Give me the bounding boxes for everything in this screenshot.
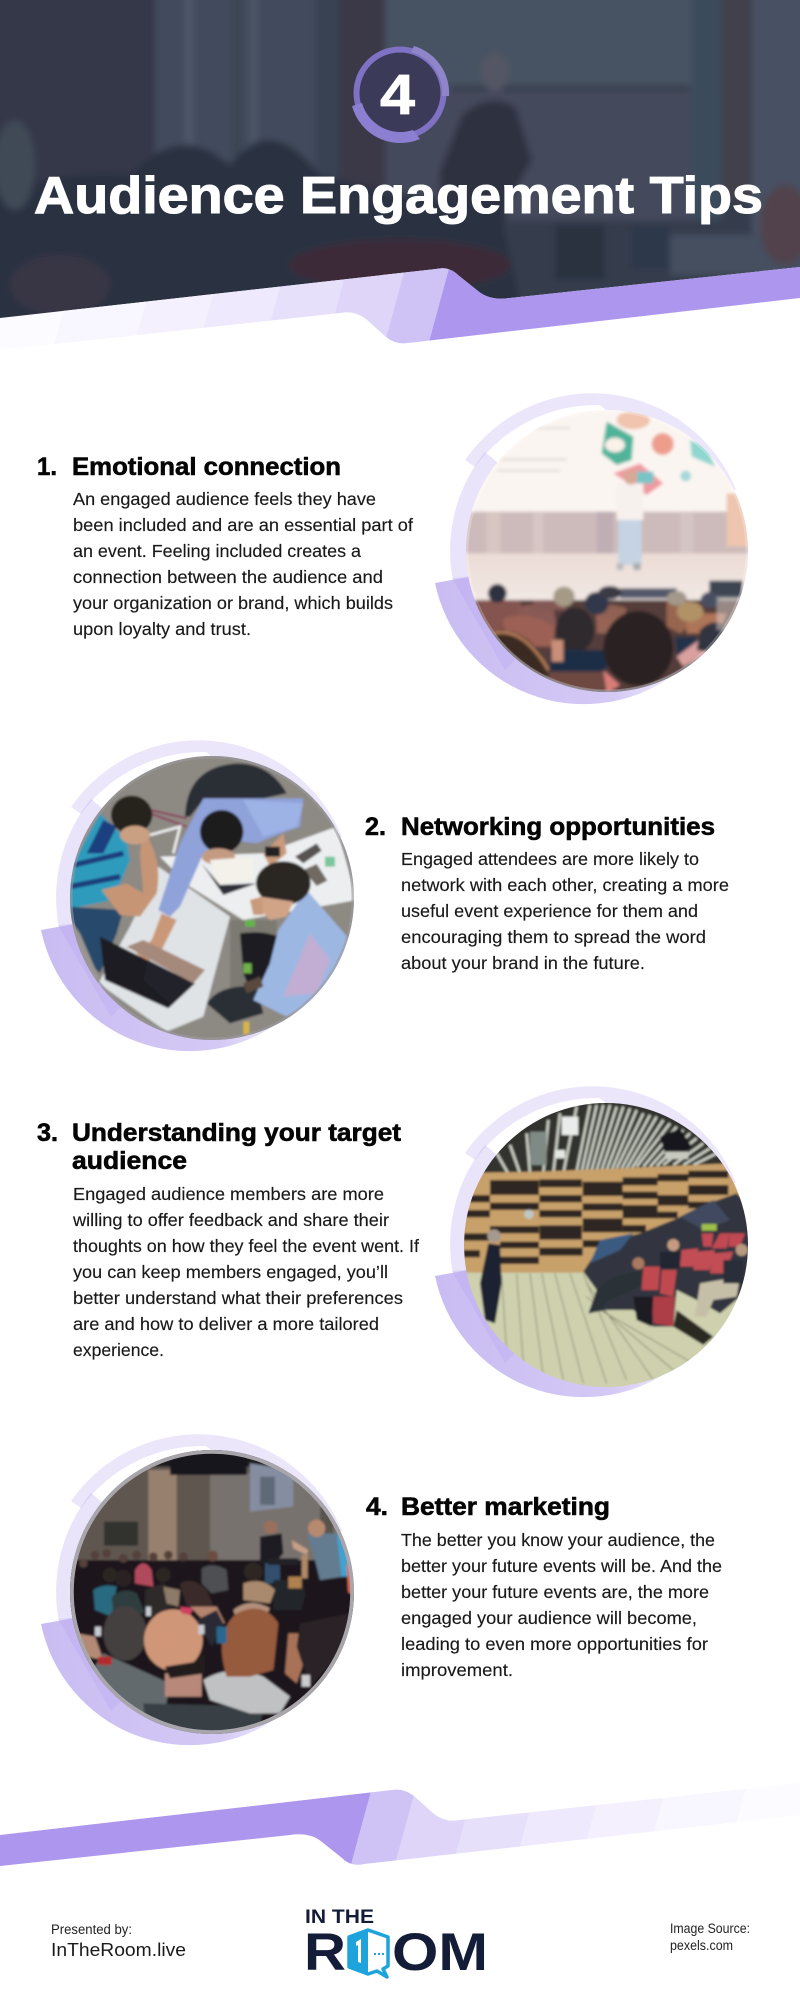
- tip 4 text: better your future events will be. And the: [401, 1556, 722, 1576]
- tip 3 heading: audience: [72, 1147, 187, 1175]
- tip 2 text: [401, 849, 729, 973]
- tip 1 heading: 1.: [37, 453, 57, 481]
- image source credit: [670, 1921, 750, 1953]
- ring graphic 3: [435, 1086, 736, 1397]
- panel: tip 2: [41, 740, 729, 1053]
- panel: tip 3: [37, 1086, 773, 1403]
- tip 4 heading: Better marketing: [401, 1493, 610, 1521]
- tip 3 text: thoughts on how they feel the event went. If: [73, 1236, 419, 1256]
- tip 1 text: upon loyalty and trust.: [73, 619, 251, 639]
- photo: lecture hall with presenter and seated audience: [464, 1103, 748, 1387]
- number badge: 4: [352, 46, 449, 143]
- tip 2 text: useful event experience for them and: [401, 901, 698, 921]
- tip 1 text: been included and are an essential part of: [73, 515, 413, 535]
- number: 4: [380, 63, 415, 127]
- tip 4 text: engaged your audience will become,: [401, 1608, 697, 1628]
- bottom wave band: [0, 1773, 800, 1883]
- tip 2 heading: Networking opportunities: [401, 813, 715, 841]
- image source credit: pexels.com: [670, 1938, 733, 1953]
- tip 4 text: improvement.: [401, 1660, 513, 1680]
- ring graphic 4: [41, 1434, 342, 1745]
- tip 3 text: better understand what their preferences: [73, 1288, 403, 1308]
- tip 3 heading: [37, 1119, 402, 1175]
- tip 4 text: better your future events are, the more: [401, 1582, 709, 1602]
- logo: In The Room: [304, 1907, 488, 1982]
- tip 3 text: you can keep members engaged, you’ll: [73, 1262, 388, 1282]
- tip 2 text: Engaged attendees are more likely to: [401, 849, 699, 869]
- photo: speaker on stage with seated audience: [466, 410, 748, 692]
- panel: tip 4: [41, 1434, 722, 1747]
- title: Audience Engagement Tips: [34, 167, 763, 225]
- tip 4 heading: 4.: [366, 1493, 388, 1521]
- tip 2 text: encouraging them to spread the word: [401, 927, 706, 947]
- tip 1 heading: Emotional connection: [72, 453, 341, 481]
- tip 2 text: about your brand in the future.: [401, 953, 645, 973]
- presented by credit: Presented by:: [51, 1922, 132, 1937]
- tip 4 text: The better you know your audience, the: [401, 1530, 715, 1550]
- tip 3 text: are and how to deliver a more tailored: [73, 1314, 379, 1334]
- top wave band: [0, 250, 800, 360]
- tip 2 heading: 2.: [365, 813, 386, 841]
- header photo: speaker and audience, dark overlay: [0, 0, 800, 340]
- tip 4 text: leading to even more opportunities for: [401, 1634, 708, 1654]
- panel: tip 1: [37, 390, 783, 713]
- icon: door with speech tail: [349, 1930, 388, 1977]
- tip 1 text: your organization or brand, which builds: [73, 593, 393, 613]
- tip 3 heading: 3.: [37, 1119, 58, 1147]
- ring graphic 1: [435, 393, 736, 704]
- photo: crowd watching speaker and guitarist: [70, 1450, 354, 1734]
- photo: three colleagues around a table, top view: [70, 756, 354, 1040]
- tip 3 text: [72, 1184, 419, 1360]
- tip 3 heading: Understanding your target: [72, 1119, 402, 1147]
- logo: In The Room: IN THE: [305, 1907, 374, 1928]
- presented by credit: [51, 1922, 186, 1960]
- footer: [51, 1907, 750, 1982]
- tip 4 text: [401, 1530, 722, 1680]
- tip 3 text: willing to offer feedback and share their: [72, 1210, 389, 1230]
- tip 1 text: An engaged audience feels they have: [73, 489, 376, 509]
- logo: In The Room: R: [304, 1923, 346, 1982]
- presented by credit: InTheRoom.live: [51, 1939, 186, 1960]
- image source credit: Image Source:: [670, 1921, 750, 1936]
- tip 1 text: [73, 489, 413, 639]
- ring graphic 2: [41, 740, 342, 1051]
- logo: In The Room: OM: [392, 1923, 488, 1982]
- tip 1 text: connection between the audience and: [73, 567, 383, 587]
- tip 3 text: experience.: [73, 1340, 164, 1360]
- tip 2 text: network with each other, creating a more: [401, 875, 729, 895]
- tip 3 text: Engaged audience members are more: [73, 1184, 384, 1204]
- tip 1 text: an event. Feeling included creates a: [73, 541, 361, 561]
